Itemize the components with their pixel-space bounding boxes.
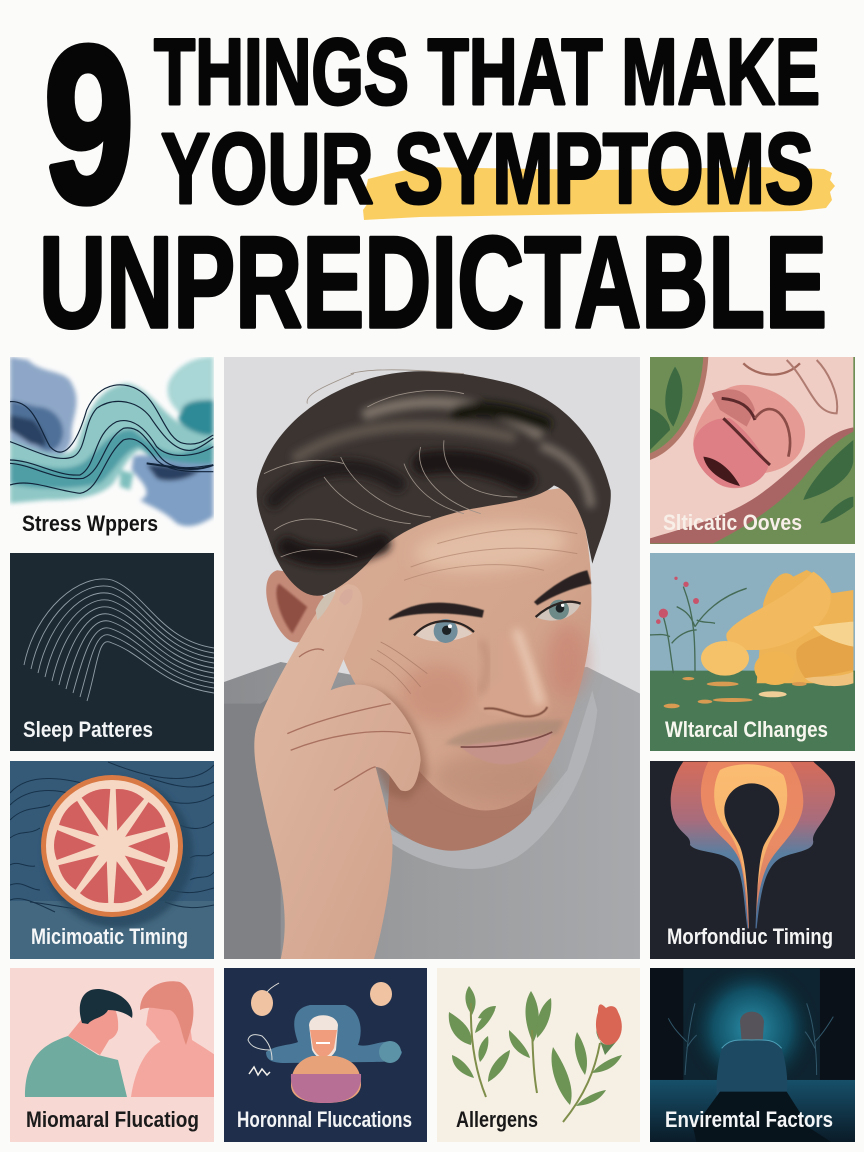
label: Allergens (456, 1107, 538, 1132)
hand (254, 584, 421, 959)
icon: red flower (596, 1004, 622, 1055)
circles (251, 982, 392, 1016)
ear (266, 570, 324, 642)
lips (693, 385, 805, 488)
hair (266, 1005, 402, 1063)
potatoes (701, 570, 853, 686)
forehead wrinkles (404, 529, 577, 580)
panel: environmental factors (650, 958, 855, 1143)
panel: allergens (437, 968, 640, 1142)
title: numeral 9: 9 (44, 1, 134, 249)
neck (388, 771, 538, 851)
panel: sciatic nerves (650, 357, 855, 544)
panel: stress triggers (10, 357, 214, 541)
nose (518, 702, 548, 714)
arch: outer blue-coral (671, 762, 835, 928)
eye wrinkles (371, 642, 427, 694)
face (309, 1015, 338, 1059)
figure: pink man (131, 981, 215, 1097)
label: Sleep Patteres (23, 717, 153, 742)
arch: light orange core (714, 764, 787, 912)
panel: hormonal fluctuations (224, 968, 427, 1142)
ground (650, 671, 857, 754)
body (291, 1056, 361, 1103)
hair (257, 370, 611, 596)
label: Morfondiuc Timing (667, 924, 833, 949)
panel: mood fluctuations (10, 968, 215, 1142)
face (334, 487, 591, 810)
person (693, 1012, 833, 1143)
label: Enviremtal Factors (665, 1107, 833, 1132)
crumbs (664, 677, 807, 708)
eyebrows (389, 603, 484, 620)
arch: orange layer (701, 762, 803, 928)
label: Horonnal Fluccations (237, 1107, 412, 1132)
panel: sleep patterns (10, 553, 214, 751)
shirt (224, 662, 640, 959)
label: Wltarcal Clhanges (665, 717, 828, 742)
hand shadow on cheek (364, 684, 430, 799)
leaves (449, 986, 622, 1106)
panel: arch timing (650, 761, 855, 959)
panel: weather changes (650, 553, 857, 754)
eyes (416, 623, 472, 641)
icon: grapefruit slice (41, 775, 193, 928)
title (39, 1, 835, 355)
label: Slticatic Ooves (663, 510, 802, 535)
title: yellow highlight (363, 167, 835, 220)
lips (464, 734, 552, 764)
label: Micimoatic Timing (31, 924, 188, 949)
panel: hormonal timing with citrus (10, 761, 214, 959)
stubble (444, 720, 564, 747)
label: Miomaral Flucatiog (26, 1107, 199, 1132)
figure: teal man (25, 989, 132, 1097)
panel: central portrait (224, 357, 640, 959)
fingernail (339, 589, 353, 605)
bare trees (668, 1003, 833, 1075)
stems (471, 1003, 600, 1122)
label: Stress Wppers (22, 511, 158, 536)
plants (650, 587, 747, 673)
leaves (650, 367, 853, 523)
keyhole (724, 783, 779, 942)
